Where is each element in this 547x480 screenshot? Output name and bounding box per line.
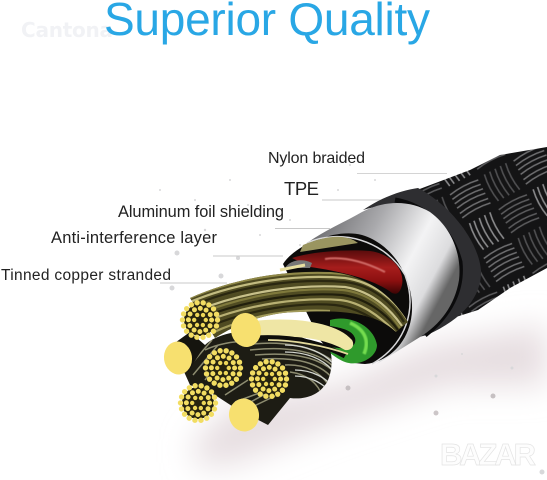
solid conductor: upper [229,311,263,349]
watermark: BAZAR: BAZAR [440,437,536,472]
label: Anti-interference layer: Anti-interference layer [51,229,218,247]
red insulated wire [292,250,402,294]
label: Aluminum foil shielding: Aluminum foil shielding [118,203,284,221]
label: Tinned copper stranded: Tinned copper stranded [1,267,171,284]
stranded conductor: upper left [182,302,218,338]
solid conductor: bottom [227,397,261,433]
tinned copper olive bundle [190,272,408,338]
cable opening interior [283,233,412,364]
lower dark strands [184,332,332,425]
stranded conductor: center [206,350,240,386]
nylon braided sheath [420,147,547,316]
label: Nylon braided: Nylon braided [268,150,365,167]
dotted background particles [129,164,544,474]
floor shadow [195,325,547,465]
pale yellow wire [246,319,353,350]
upper olive strands [300,237,358,252]
label: TPE: TPE [284,178,319,199]
black collar [363,188,481,338]
stranded conductor: lower [180,386,216,420]
inner wire tip [285,260,312,268]
dark wire stems [172,332,205,372]
label: TPE [284,178,383,200]
green insulated wire [322,318,377,363]
silver TPE shell [307,203,460,364]
watermark: Cantona: Cantona [21,18,113,42]
solid conductor: left [162,340,194,376]
stranded conductor: right [252,362,286,396]
cable illustration [162,130,547,433]
